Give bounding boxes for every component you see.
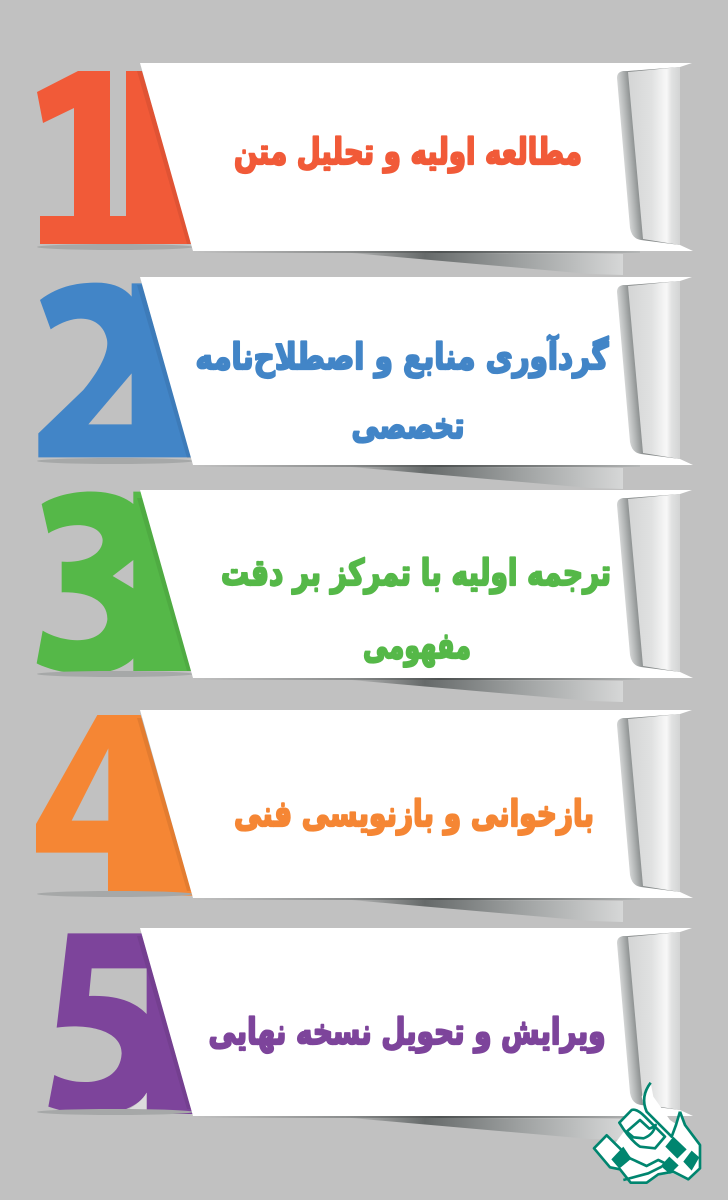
panel: step 1	[37, 63, 693, 275]
heading: step 2: گردآوری منابع و اصطلاح‌نامه	[196, 334, 609, 378]
heading: step 3: مفهومی	[363, 626, 471, 667]
heading: step 1: مطالعه اولیه و تحلیل متن	[234, 132, 582, 173]
panel: step 4	[36, 710, 693, 922]
number 3	[37, 492, 192, 674]
heading: step 4: بازخوانی و بازنویسی فنی	[234, 794, 594, 835]
paper banner 1	[37, 63, 693, 275]
panel: step 5	[37, 928, 693, 1140]
panel: step 3	[37, 490, 693, 702]
paper banner 5	[37, 928, 693, 1140]
number 2	[38, 283, 192, 457]
heading: step 2	[196, 334, 609, 447]
number 5	[48, 933, 193, 1114]
number 1	[37, 71, 192, 244]
icon: logo	[593, 1083, 700, 1183]
panel: step 2	[37, 277, 693, 489]
number 4	[36, 715, 193, 896]
heading: step 3	[221, 553, 611, 667]
paper banner 3	[37, 490, 693, 702]
paper banner 4	[37, 710, 693, 922]
paper banner 2	[37, 277, 693, 489]
heading: step 2: تخصصی	[352, 406, 464, 447]
heading: step 3: ترجمه اولیه با تمرکز بر دقت	[221, 553, 611, 594]
fold under number 5	[120, 1093, 147, 1114]
heading: step 5: ویرایش و تحویل نسخه نهایی	[208, 1012, 606, 1053]
